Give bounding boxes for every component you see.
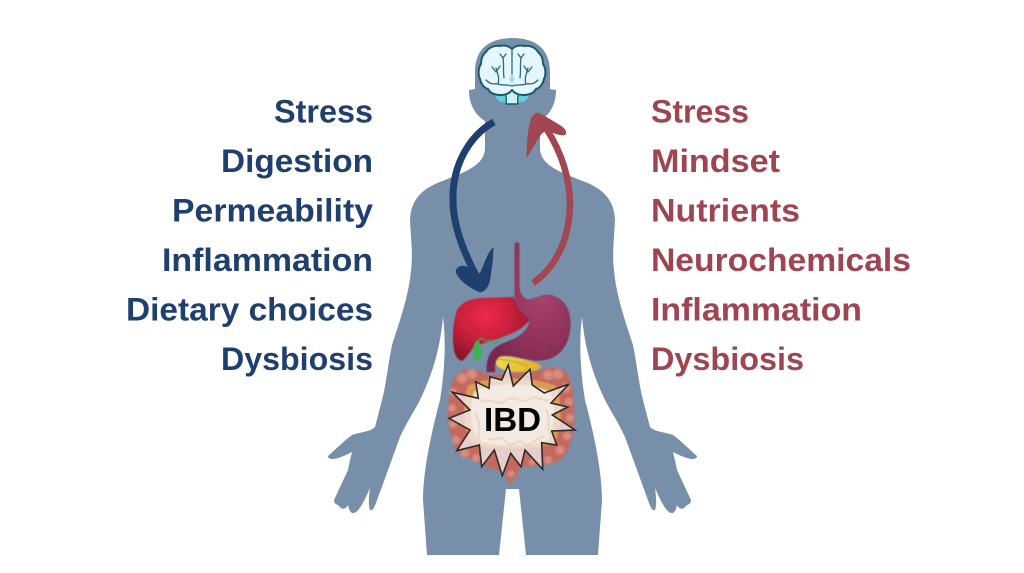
text block: brain-to-gut factors: Inflammation	[162, 242, 373, 278]
text block: brain-to-gut factors: Permeability	[172, 192, 373, 228]
callout: IBD starburst: IBD	[484, 401, 541, 438]
human body silhouette	[328, 38, 697, 555]
arrow: brain to gut (blue)	[453, 122, 494, 292]
text block: gut-to-brain factors: Stress	[651, 94, 749, 130]
organ: small intestine	[464, 378, 561, 448]
text block: gut-to-brain factors: Dysbiosis	[651, 341, 804, 377]
organ: liver	[453, 297, 530, 361]
text block: brain-to-gut factors: Dysbiosis	[221, 341, 373, 377]
text block: gut-to-brain factors: Nutrients	[651, 192, 800, 228]
text block: brain-to-gut factors	[126, 94, 373, 377]
text block: gut-to-brain factors: Neurochemicals	[651, 242, 911, 278]
callout: IBD starburst	[449, 365, 575, 476]
text block: gut-to-brain factors: Mindset	[651, 143, 780, 179]
text block: brain-to-gut factors: Stress	[274, 94, 373, 130]
icon: brain	[479, 45, 545, 104]
organ: pancreas	[493, 356, 541, 372]
text block: gut-to-brain factors: Inflammation	[651, 292, 862, 328]
organ: colon	[448, 367, 574, 483]
text block: brain-to-gut factors: Digestion	[221, 143, 373, 179]
organ: gallbladder and bile duct	[473, 337, 505, 360]
arrow: gut to brain (red)	[527, 113, 570, 283]
text block: brain-to-gut factors: Dietary choices	[126, 292, 373, 328]
text block: gut-to-brain factors	[651, 94, 911, 377]
organ: stomach and esophagus	[487, 243, 570, 372]
